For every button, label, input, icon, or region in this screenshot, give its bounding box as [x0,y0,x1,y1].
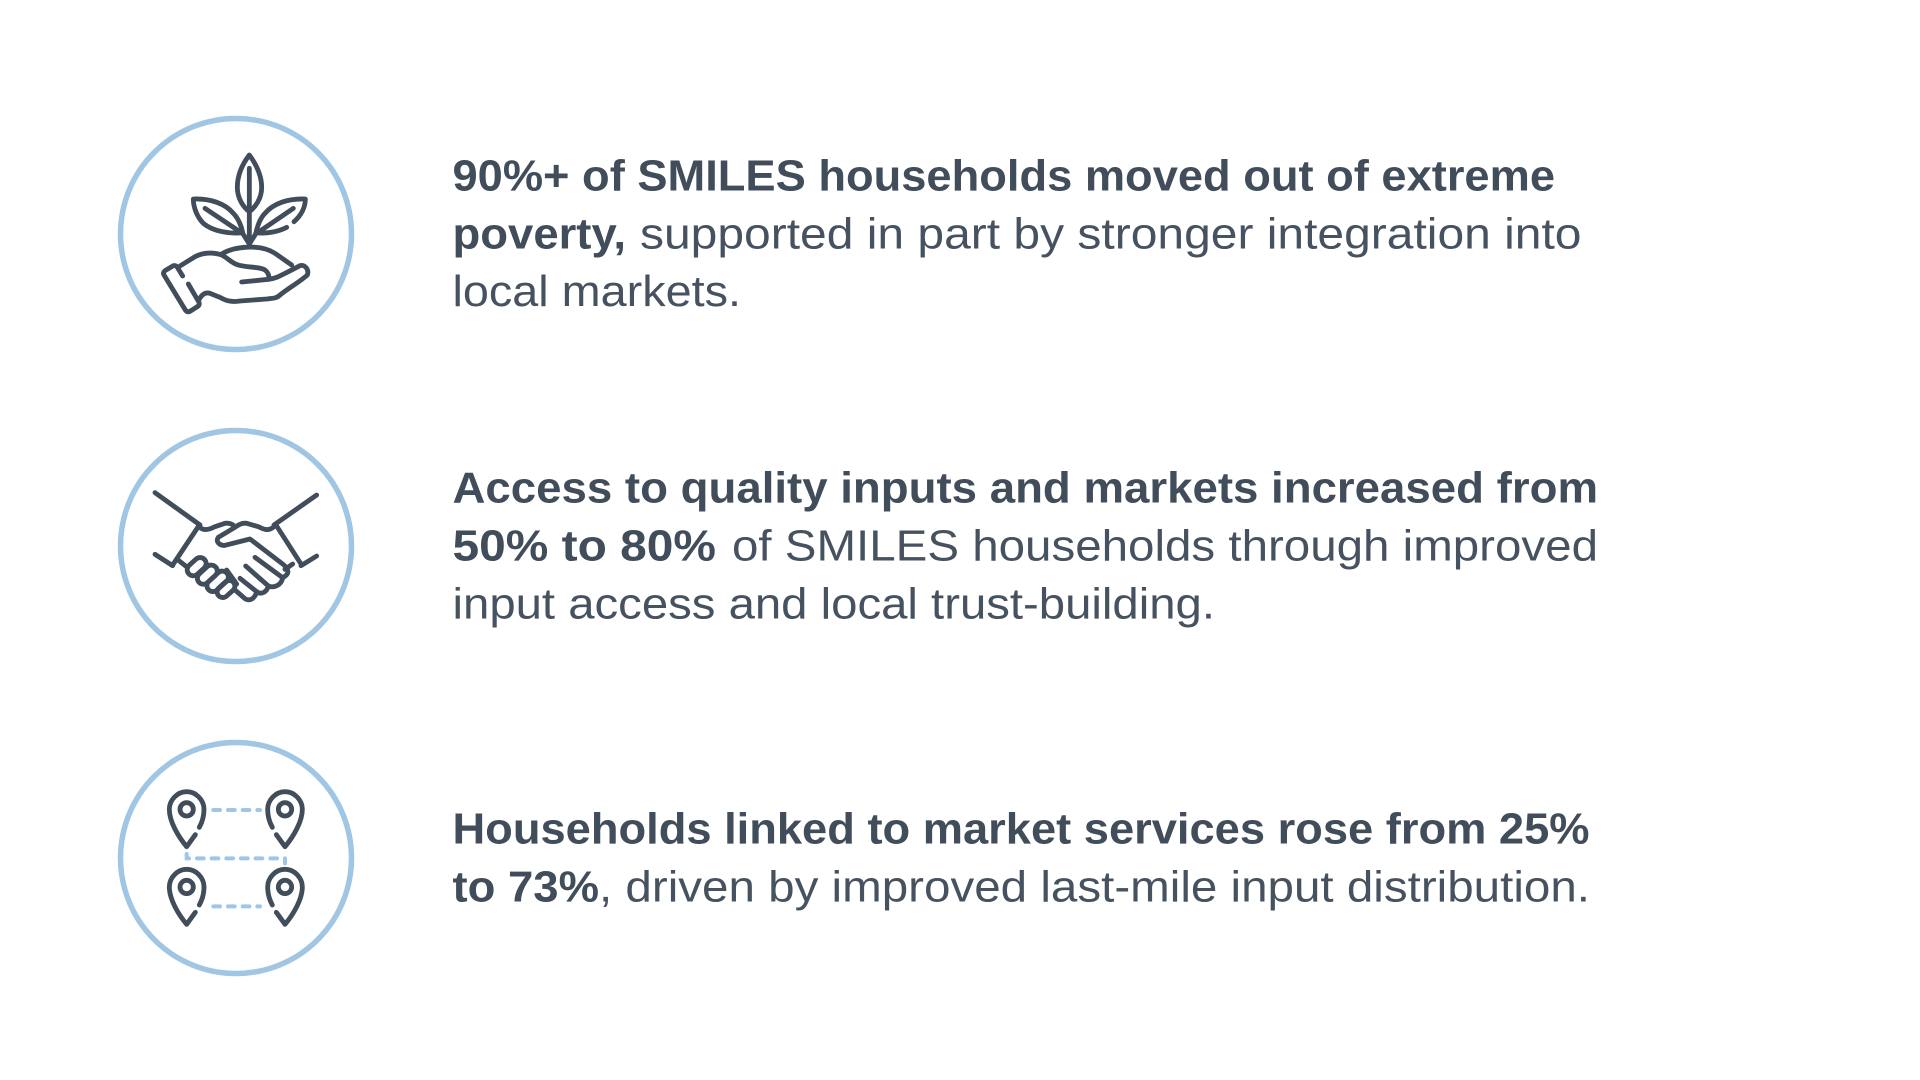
text block: extreme poverty: local markets. [452,267,741,316]
text block: access to inputs: of SMILES households through improved [732,522,1598,570]
icon: hand holding a plant [120,118,352,350]
text block: market services [452,804,1590,912]
text block: extreme poverty: 90%+ of SMILES households moved out of extreme [452,152,1555,200]
panel: access to inputs finding [120,430,1598,662]
text block: extreme poverty: supported in part by stronger integration into [640,210,1582,258]
text block: access to inputs: input access and local trust-building. [452,580,1215,628]
text block: access to inputs [452,464,1598,628]
text block: extreme poverty [452,152,1582,316]
text block: market services: to 73% [452,862,599,912]
text block: market services: , driven by improved last-mile input distribution. [599,862,1590,912]
text block: access to inputs: Access to quality inputs and markets increased from [452,464,1598,512]
icon: handshake [120,430,352,662]
icon: four connected map pins [120,742,352,974]
panel: extreme poverty finding [120,118,1582,350]
text block: market services: Households linked to market services rose from 25% [452,804,1590,854]
text block: access to inputs: 50% to 80% [452,522,716,570]
text block: extreme poverty: poverty, [452,210,626,258]
panel: market services finding [120,742,1590,974]
